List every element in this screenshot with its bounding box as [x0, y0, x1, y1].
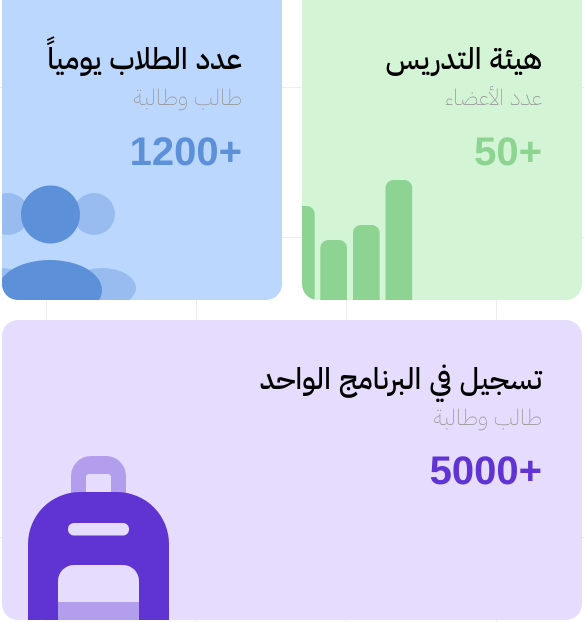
number: 1200+: 1200+: [130, 130, 242, 174]
number: 50+: 50+: [474, 130, 542, 174]
heading: daily students: عدد الطلاب يومياً: [47, 43, 242, 76]
heading: teaching staff: هيئة التدريس: [386, 43, 542, 76]
icon: backpack: [28, 456, 169, 620]
panel: program enrollment: [2, 320, 582, 620]
subtitle: member count: عدد الأعضاء: [445, 85, 542, 110]
chart: rising bars: [302, 180, 412, 300]
number: 5000+: 5000+: [430, 449, 542, 493]
panel: teaching staff: [302, 0, 582, 300]
subtitle: students: طالب وطالبة: [134, 85, 242, 110]
subtitle: students: طالب وطالبة: [434, 405, 542, 430]
panel: daily students: [2, 0, 282, 300]
icon: group of people: [2, 186, 136, 300]
heading: program enrollment: تسجيل في البرنامج الواحد: [260, 363, 542, 396]
